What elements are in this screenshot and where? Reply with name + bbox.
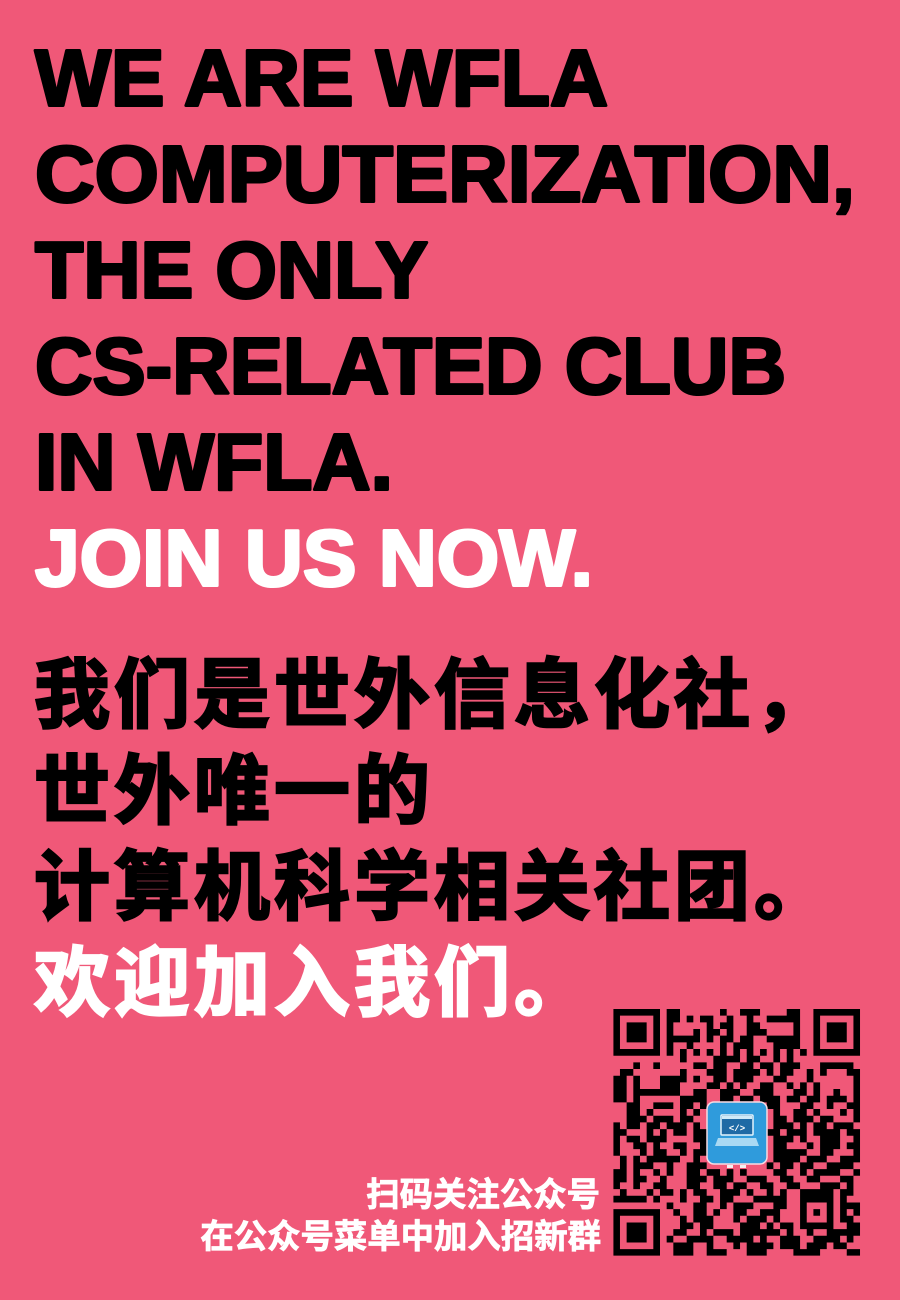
english heading: THE ONLY (35, 226, 428, 314)
icon: QR centre laptop logo: </> (729, 1124, 745, 1134)
english call to action: JOIN US NOW. (35, 514, 593, 602)
chinese heading: 我们是世外信息化社， (34, 654, 834, 738)
icon: QR centre laptop logo (707, 1102, 767, 1168)
chinese heading (34, 654, 834, 930)
chinese heading: 世外唯一的 (34, 750, 434, 834)
chinese call to action: 欢迎加入我们。 (34, 942, 594, 1026)
chinese heading: 计算机科学相关社团。 (34, 846, 834, 930)
english heading: WE ARE WFLA (35, 34, 608, 122)
english heading: CS-RELATED CLUB (35, 322, 786, 410)
scan instructions (200, 1177, 601, 1256)
scan instructions: 扫码关注公众号 (366, 1177, 600, 1214)
english heading: COMPUTERIZATION, (35, 130, 855, 218)
scan instructions: 在公众号菜单中加入招新群 (200, 1219, 601, 1256)
english heading (35, 34, 855, 506)
english heading: IN WFLA. (35, 418, 393, 506)
QR code (613, 1012, 860, 1252)
